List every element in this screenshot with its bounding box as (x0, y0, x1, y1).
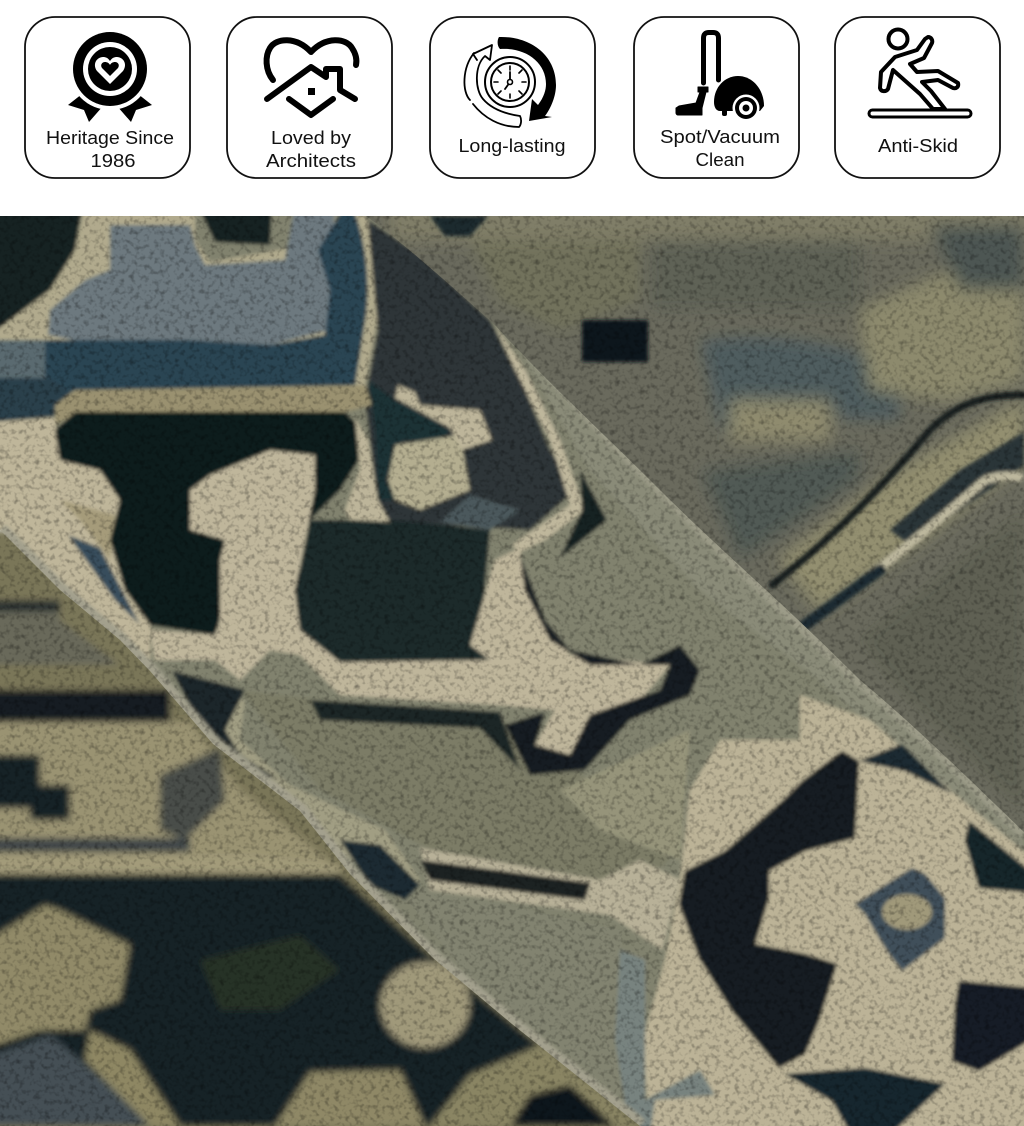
cream rim right (495, 325, 585, 552)
icon: vacuum cleaner (676, 32, 764, 122)
navy ornament (679, 751, 859, 1068)
label: Spot/Vacuum (660, 127, 780, 147)
label: Loved by (271, 128, 351, 148)
lower left edge details (205, 695, 420, 900)
badge: spot/vacuum clean (634, 17, 799, 178)
icon: heart and house (267, 40, 356, 115)
dark line (310, 700, 520, 770)
teal cross (368, 380, 450, 500)
label: Heritage Since (46, 128, 174, 148)
icon: clock with circular arrows (464, 37, 556, 127)
charcoal upper panel (365, 220, 575, 530)
badge: loved by architects (227, 17, 392, 178)
label: 1986 (90, 151, 136, 171)
badge: heritage since 1986 (25, 17, 190, 178)
black notch at top (200, 216, 274, 247)
cream stitch band (420, 848, 680, 950)
rug pattern: background lines (430, 216, 1024, 625)
black corner (0, 216, 82, 329)
dark scroll (505, 555, 700, 775)
cream blob (388, 435, 470, 510)
lower rim (0, 530, 640, 1126)
cream left patch (0, 418, 150, 671)
cream lower right (643, 695, 1024, 1126)
cream figure (150, 450, 670, 755)
icon: slipping person (869, 30, 971, 117)
rug background: upper right, out of focus (366, 216, 1024, 832)
small cream column (345, 418, 390, 522)
badge: long-lasting (430, 17, 595, 178)
label: Architects (266, 151, 356, 171)
tan stripe (55, 385, 372, 425)
cream trim upper left (0, 216, 336, 345)
olive field shading (520, 350, 1024, 860)
badge: anti-skid (835, 17, 1000, 178)
label: Anti-Skid (878, 136, 958, 156)
grey-blue strip (615, 950, 715, 1126)
upper rim (554, 386, 1024, 836)
blue-grey block (48, 206, 335, 345)
icon: medal with heart (68, 28, 152, 122)
rug background: lower left, out of focus (0, 530, 660, 1126)
cream rim of blue block (352, 206, 380, 385)
label: Long-lasting (458, 136, 566, 156)
teal sliver (68, 535, 140, 625)
charcoal lower panel (280, 520, 490, 662)
label: Clean (696, 150, 744, 170)
black motif left (55, 412, 362, 635)
feature badges row (25, 17, 1000, 178)
teal panels (45, 206, 372, 392)
